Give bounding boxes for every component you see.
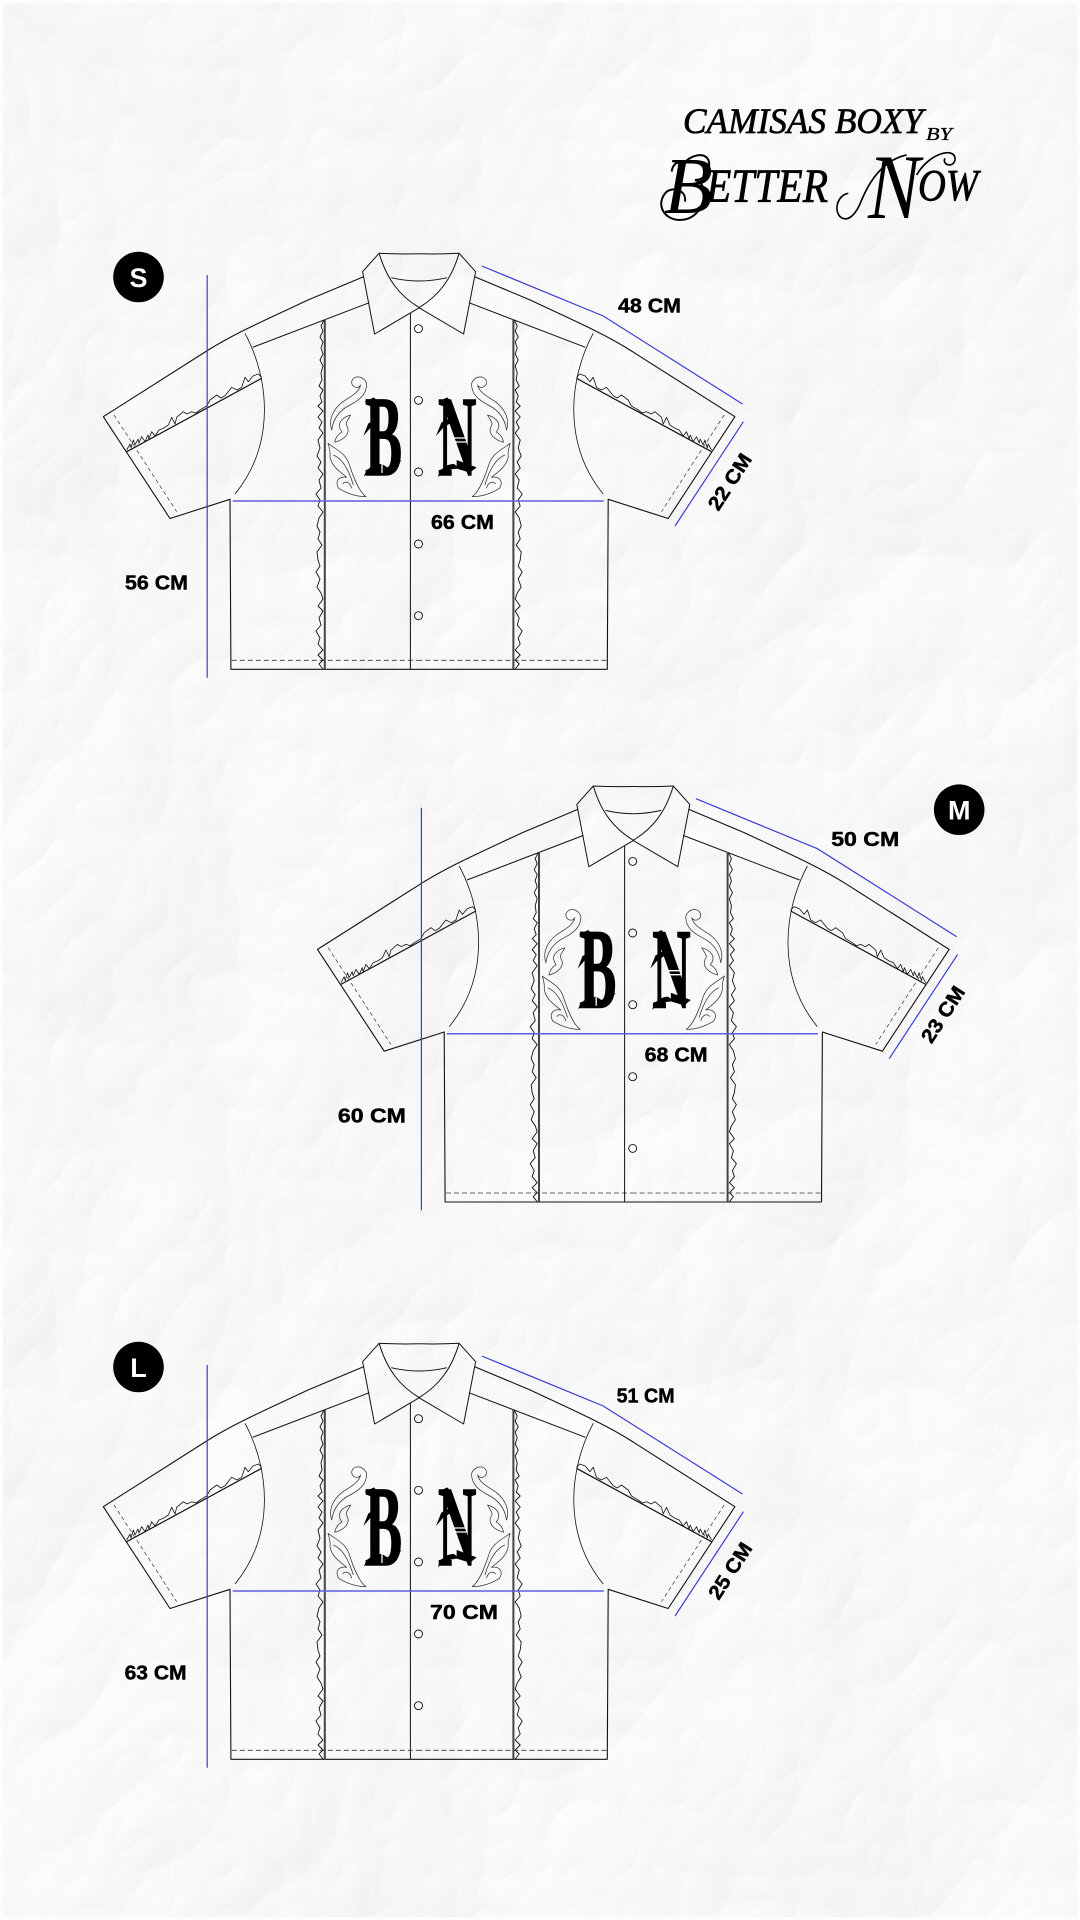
measurement labels (338, 829, 970, 1128)
panel: size M shirt (318, 784, 984, 1210)
shirt technical drawing S (103, 253, 735, 669)
heading line: Camisas Boxy by: CAMISAS BOXY (683, 101, 927, 141)
brand wordmark: Better Now: ETTER (705, 160, 828, 213)
brand wordmark: Better Now: N (867, 136, 924, 238)
measurement labels: 63 CM (125, 1663, 187, 1685)
measurement labels: 68 CM (645, 1045, 708, 1067)
chest monogram B N (363, 1463, 477, 1591)
measurement labels: 60 CM (338, 1106, 406, 1128)
measurement labels: 70 CM (430, 1602, 498, 1624)
measurement lines (207, 266, 743, 678)
brand wordmark: Better Now (661, 136, 981, 238)
chest monogram B N (363, 373, 477, 501)
measurement labels: 22 CM (704, 450, 757, 515)
measurement labels: 48 CM (618, 296, 681, 318)
measurement labels: 50 CM (831, 829, 899, 851)
chest monogram B N (578, 906, 691, 1033)
brand wordmark: Better Now: B (664, 143, 713, 231)
chest monogram B N: B (365, 373, 402, 500)
measurement lines (421, 799, 958, 1210)
chest monogram B N: N (438, 374, 476, 501)
size badge M: M (948, 796, 970, 826)
measurement labels: 23 CM (917, 982, 970, 1047)
measurement labels (125, 1386, 757, 1685)
shirt technical drawing L (103, 1343, 735, 1759)
measurement lines (207, 1356, 743, 1768)
measurement labels: 56 CM (125, 573, 188, 595)
chest monogram B N: B (365, 1463, 402, 1590)
measurement labels: 51 CM (617, 1386, 675, 1408)
panel: size L shirt (103, 1342, 757, 1768)
chest monogram B N: N (652, 906, 691, 1033)
title: Camisas Boxy by Better Now (661, 101, 981, 238)
size badge S: S (129, 263, 148, 293)
size badge M (934, 784, 984, 835)
size badge L (113, 1342, 164, 1392)
brand wordmark: Better Now: OW (918, 161, 981, 210)
shirt technical drawing M (318, 786, 949, 1202)
chest monogram B N: N (438, 1464, 476, 1591)
measurement labels: 25 CM (704, 1539, 757, 1604)
chest monogram B N: B (579, 906, 616, 1033)
measurement labels (125, 296, 757, 595)
panel: size S shirt (103, 252, 757, 678)
size badge S (113, 252, 164, 302)
heading line: Camisas Boxy by: BY (926, 124, 954, 144)
size badge L: L (130, 1353, 147, 1383)
measurement labels: 66 CM (431, 512, 494, 534)
